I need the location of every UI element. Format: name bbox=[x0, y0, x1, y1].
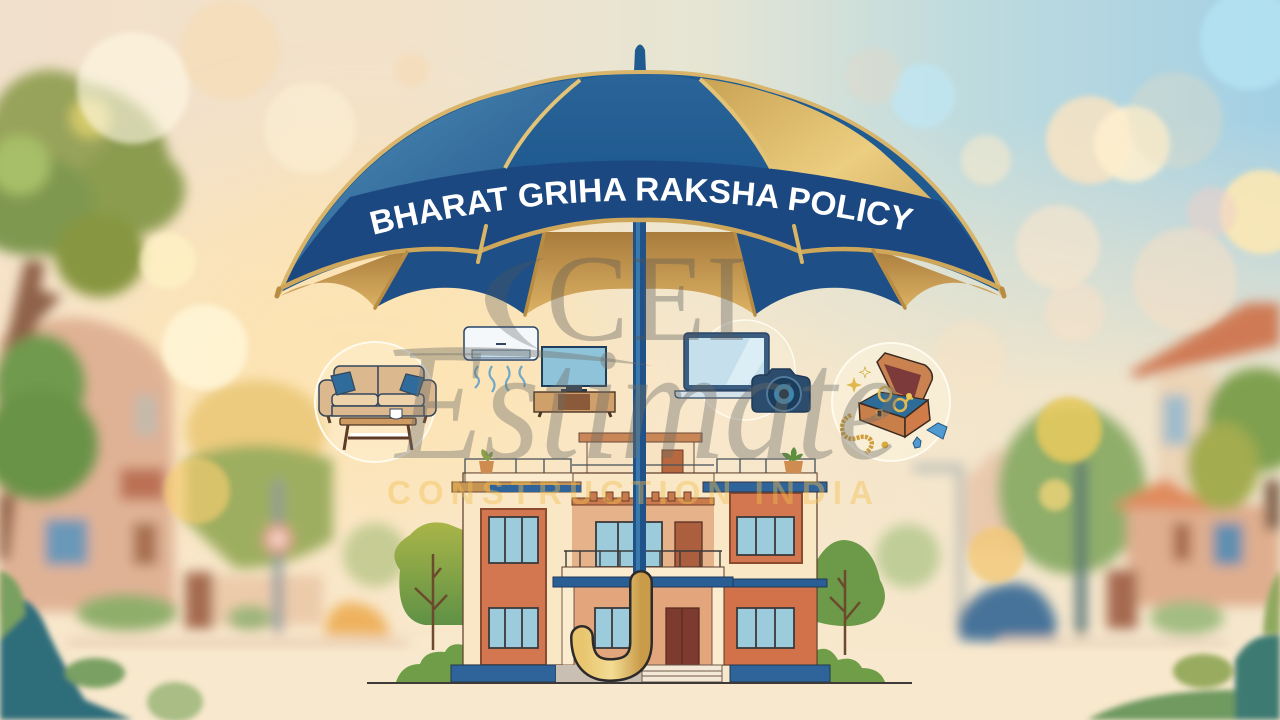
icon: sofa and coffee table bbox=[315, 342, 436, 462]
balcony bbox=[553, 551, 827, 587]
windows bbox=[489, 517, 794, 648]
umbrella tip bbox=[634, 44, 646, 72]
left tree bbox=[394, 522, 463, 650]
watermark: CEI: CEI bbox=[546, 230, 747, 367]
upper central wall bbox=[579, 433, 702, 483]
watermark: crescent behind CEI bbox=[485, 258, 545, 350]
left blurred building bbox=[0, 318, 323, 629]
ground line bbox=[367, 682, 912, 684]
umbrella underside panels bbox=[280, 232, 1000, 315]
umbrella handle bbox=[582, 582, 641, 670]
road bbox=[65, 650, 1235, 720]
walls bbox=[463, 473, 817, 665]
icon: air conditioner bbox=[464, 327, 538, 392]
bushes bbox=[396, 644, 885, 682]
banner band bbox=[280, 160, 1000, 288]
umbrella shaft over house bbox=[633, 300, 646, 578]
umbrella pole bbox=[633, 222, 646, 577]
doors bbox=[666, 522, 702, 665]
base and steps bbox=[451, 665, 830, 682]
umbrella canopy bbox=[277, 72, 1004, 315]
banner text: BHARAT GRIHA RAKSHA POLICY bbox=[370, 178, 914, 234]
right tree bbox=[817, 540, 885, 655]
umbrella bbox=[274, 44, 1006, 317]
watermark: Estimate: Estimate bbox=[394, 315, 900, 493]
icon: laptop bbox=[675, 320, 795, 420]
foreground foliage bbox=[0, 570, 1280, 720]
watermark bbox=[387, 230, 900, 511]
sunlight glow bbox=[120, 170, 600, 510]
left blurred trees bbox=[0, 70, 407, 649]
watermark: Construction India: CONSTRUCTION INDIA bbox=[387, 474, 873, 511]
crenellations bbox=[572, 492, 714, 505]
right blurred buildings and trees bbox=[876, 303, 1280, 649]
roof terraces bbox=[452, 447, 827, 492]
house bbox=[367, 433, 912, 684]
watermark: Estimate swash bbox=[393, 347, 654, 366]
icon: television on stand bbox=[534, 347, 615, 417]
bokeh circles bbox=[77, 0, 1280, 583]
gold ribs and rim bbox=[279, 72, 1002, 294]
icon: jewellery chest bbox=[832, 343, 950, 461]
icon: camera bbox=[752, 369, 810, 412]
